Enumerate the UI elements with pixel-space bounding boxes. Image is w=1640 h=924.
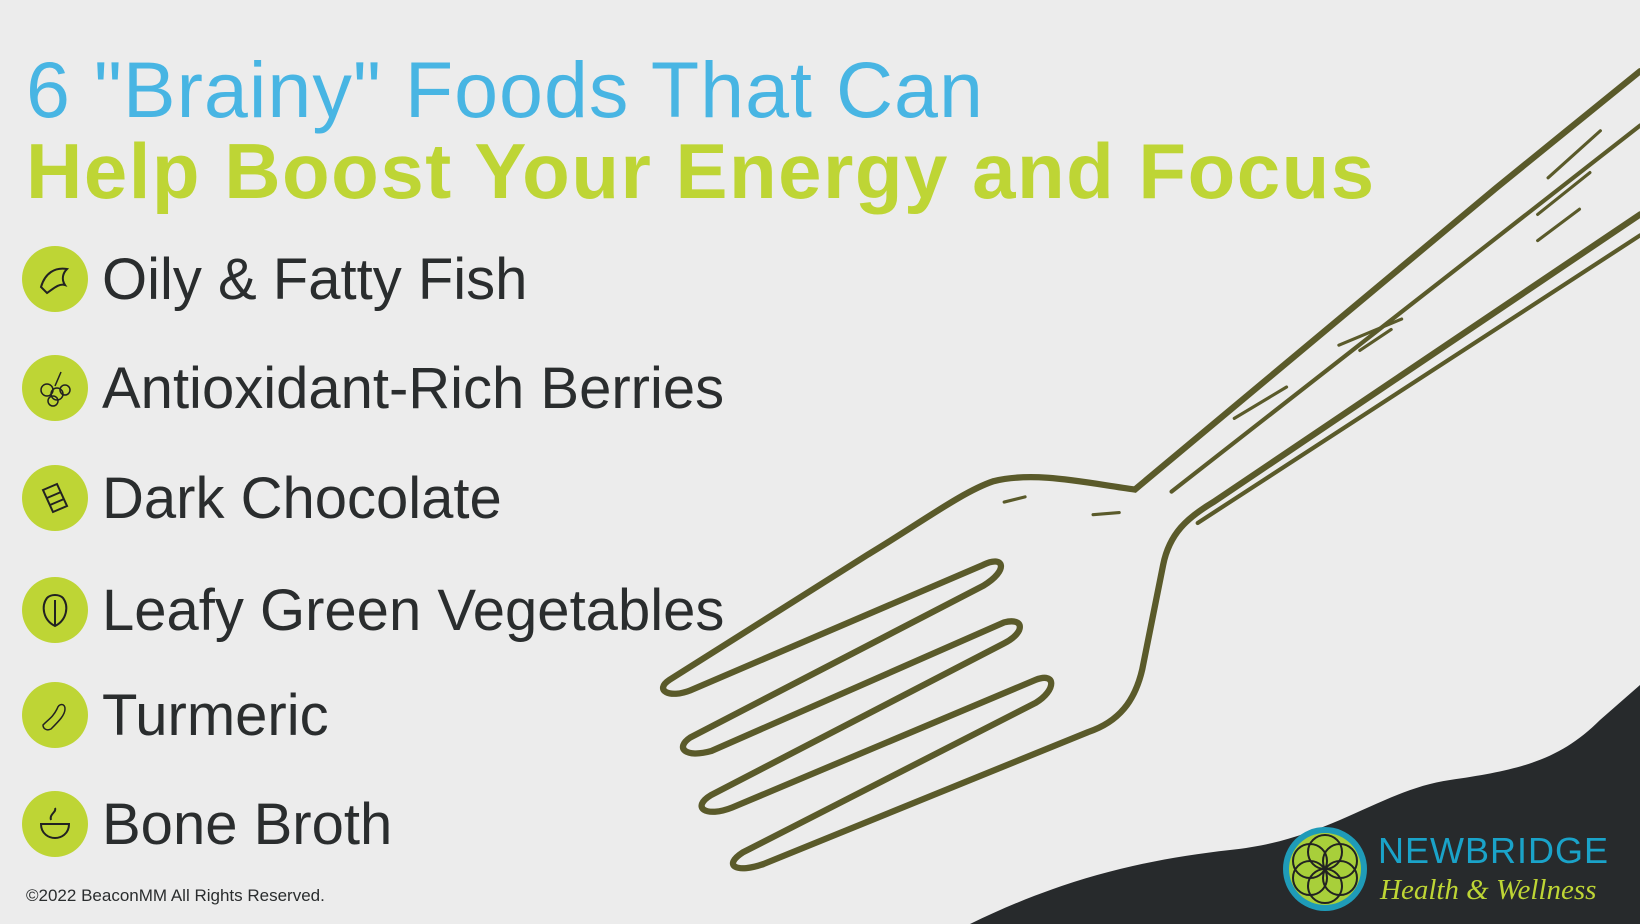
logo text: NEWBRIDGE [1378, 830, 1609, 871]
logo [1283, 827, 1609, 911]
logo: Health & Wellness [1380, 874, 1596, 906]
copyright: ©2022 BeaconMM All Rights Reserved. [26, 886, 325, 905]
item: bone broth: Bone Broth [102, 792, 392, 856]
item: leafy greens: Leafy Green Vegetables [102, 578, 724, 642]
title line 1: 6 "Brainy" Foods That Can [26, 45, 984, 134]
logo icon [1283, 827, 1367, 911]
dark blob [970, 685, 1640, 924]
item: berries: Antioxidant-Rich Berries [102, 356, 724, 420]
title line 2: Help Boost Your Energy and Focus [26, 127, 1376, 215]
item: turmeric: Turmeric [102, 682, 329, 748]
item: chocolate: Dark Chocolate [102, 466, 502, 530]
fork illustration [663, 71, 1640, 868]
item: fish: Oily & Fatty Fish [102, 246, 527, 312]
